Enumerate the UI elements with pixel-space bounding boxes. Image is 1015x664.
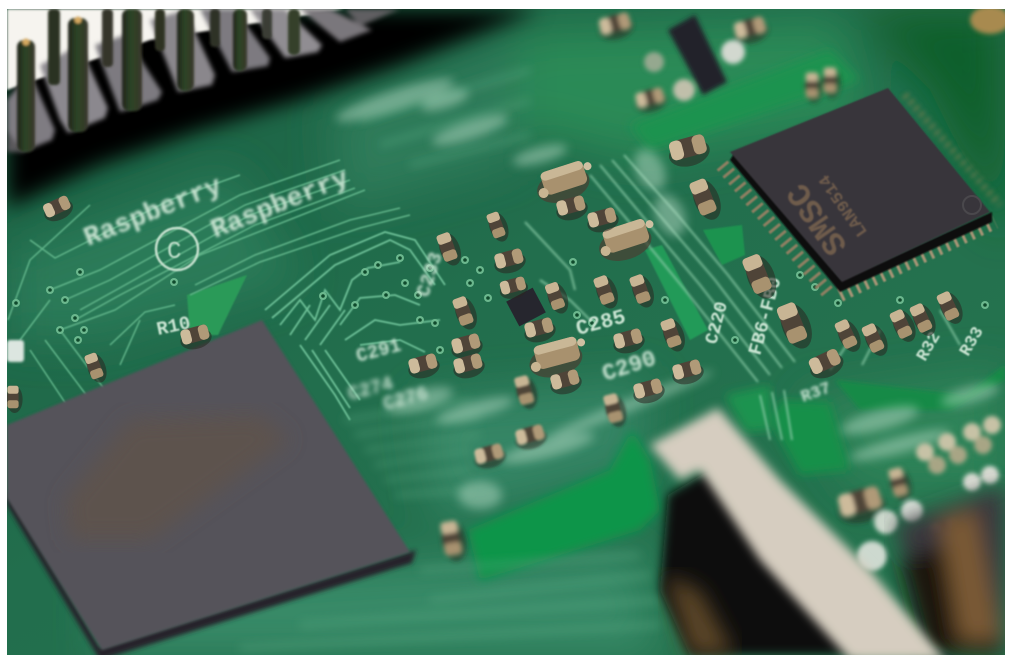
chip pins left <box>722 165 830 295</box>
chip body <box>730 88 990 282</box>
chip brown marking <box>65 415 290 540</box>
pad: right of cable <box>770 400 850 475</box>
copper traces: meander <box>265 232 445 420</box>
copper traces: centre bus <box>525 155 960 440</box>
pad: lower centre <box>468 430 660 580</box>
logo circle <box>156 228 198 270</box>
label: R37: R37 <box>799 379 834 408</box>
blurred traces: lower area <box>240 70 660 648</box>
label: C285: C285 <box>574 306 629 342</box>
label: C290: C290 <box>599 346 660 388</box>
pin-1 dimple <box>963 196 981 214</box>
blurred components, top area <box>596 6 1010 116</box>
metal pins <box>17 9 300 152</box>
connector, bottom right <box>895 485 1005 655</box>
white background behind pins <box>7 9 345 90</box>
pad: R10 <box>187 275 247 335</box>
pad: upper strip <box>630 50 860 150</box>
grey plastic teeth <box>7 9 400 152</box>
silkscreen labels <box>80 164 989 416</box>
label: C276: C276 <box>381 383 431 416</box>
chip marking: SMSC: SMSC <box>780 175 856 261</box>
beige ribbon cable <box>650 408 945 660</box>
chip pins right <box>905 95 1000 205</box>
dark transistor <box>668 15 727 95</box>
blurred silkscreen patches <box>333 71 1001 509</box>
label: FB6: FB6-FB0 <box>745 275 786 358</box>
chip: bottom left square <box>7 320 416 660</box>
label: C291: C291 <box>354 335 404 368</box>
pad: below chip <box>703 225 745 265</box>
slightly blurred components <box>471 373 630 472</box>
ribbon connector, bottom centre <box>650 408 945 660</box>
brown reflection <box>665 575 735 655</box>
black header shadow band <box>7 9 540 208</box>
chip marking: LAN: LAN9514 <box>816 170 873 240</box>
connector dark body <box>660 470 860 655</box>
logo circle: C <box>167 239 181 266</box>
surface-mount components <box>7 133 967 413</box>
pad: centre strip <box>645 245 708 340</box>
header pins block, top left <box>7 9 540 208</box>
chip top face <box>7 320 410 650</box>
label: C220: C220 <box>702 300 733 347</box>
pad: near ribbon top <box>725 385 772 432</box>
label: Raspberry 2: Raspberry <box>207 164 354 246</box>
label: R33: R33 <box>957 324 989 360</box>
label: C274: C274 <box>346 373 396 406</box>
blurred components, lower area <box>439 416 1001 571</box>
board vias <box>12 254 989 354</box>
pad: lower right strip <box>835 365 1005 410</box>
chip pins bottom <box>840 222 995 295</box>
chip: top right QFP <box>722 88 1000 295</box>
label: R32: R32 <box>914 329 946 365</box>
label: C233: C233 <box>413 250 448 300</box>
bright green solder-mask pads <box>187 50 1005 580</box>
chip side shadow <box>7 490 416 660</box>
label: Raspberry: Raspberry <box>80 172 227 254</box>
chip body shadow <box>730 152 992 292</box>
copper traces: left fan <box>8 160 410 410</box>
label: R10: R10 <box>155 312 193 341</box>
small black IC <box>506 288 546 326</box>
